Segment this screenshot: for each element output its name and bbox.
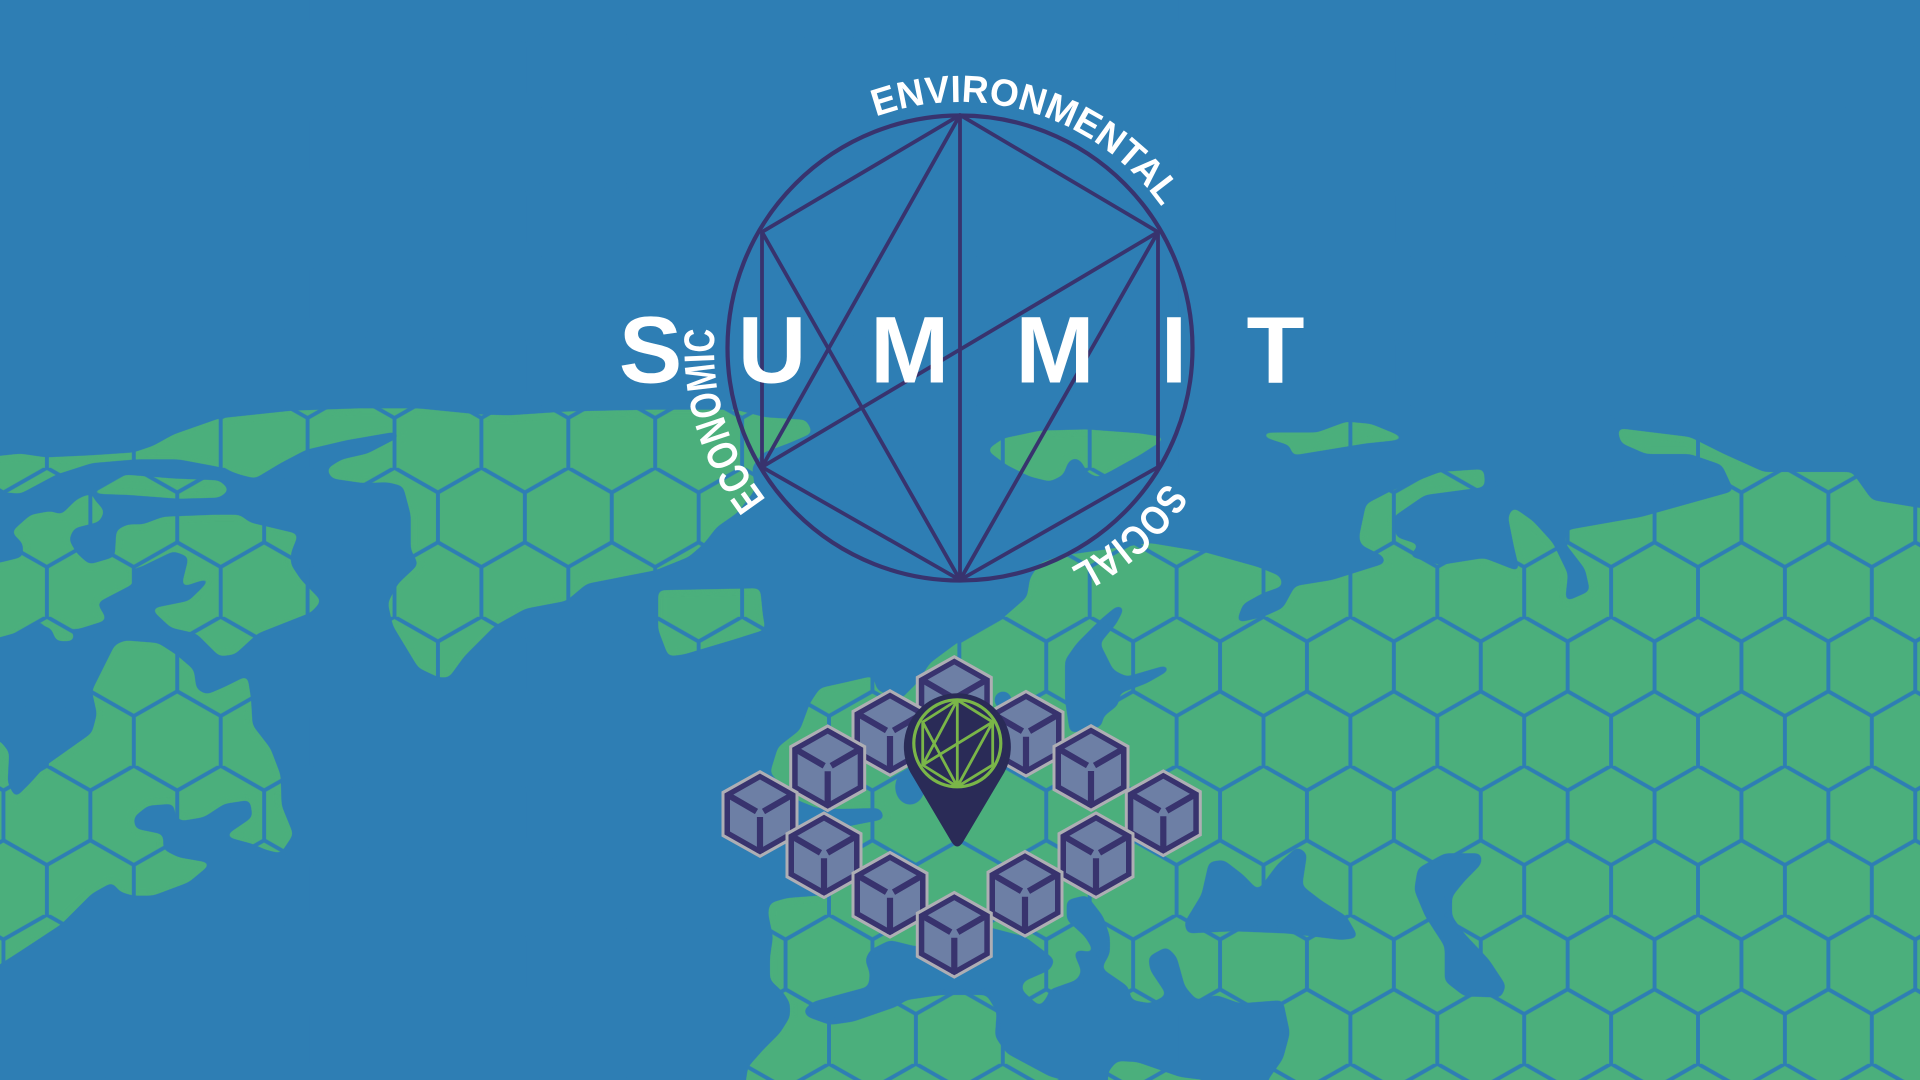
southern sea bbox=[803, 895, 1290, 1080]
label: SOCIAL: SOCIAL bbox=[1072, 486, 1186, 586]
label: ECONOMIC: ECONOMIC bbox=[684, 330, 765, 516]
cube: lower left bbox=[786, 811, 862, 899]
left continent bbox=[0, 408, 813, 974]
cube: lower left inner bbox=[852, 851, 928, 939]
cube: upper right bbox=[1052, 724, 1130, 812]
logo lattice lines bbox=[762, 115, 1158, 580]
title: SUMMIT: SUMMIT bbox=[619, 298, 1305, 404]
small lake by top cube bbox=[994, 691, 1012, 709]
northern inlet bbox=[1065, 606, 1170, 733]
southern sea island bbox=[1108, 1061, 1220, 1080]
logo: circle with hexagon lattice bbox=[728, 115, 1192, 580]
right continent bbox=[740, 428, 1920, 1080]
cube: top bbox=[916, 655, 993, 743]
pin body bbox=[904, 693, 1011, 846]
pin logo bbox=[914, 700, 1001, 787]
cube: far left bbox=[722, 770, 798, 858]
cube: lower right inner bbox=[986, 850, 1064, 938]
inland seas and lakes bbox=[803, 606, 1506, 1080]
small lake by pin bbox=[895, 769, 925, 805]
logo circle bbox=[728, 116, 1192, 580]
cube: upper left inner bbox=[852, 689, 928, 777]
cube: bottom bbox=[916, 891, 993, 979]
central island bbox=[987, 429, 1167, 482]
small northern island bbox=[1263, 422, 1408, 456]
land masses bbox=[0, 408, 1920, 1080]
label: ENVIRONMENTAL: ENVIRONMENTAL bbox=[870, 76, 1174, 206]
cube: upper left bbox=[789, 724, 866, 812]
icon: map pin with logo bbox=[904, 693, 1011, 846]
cube ring bbox=[722, 655, 1202, 979]
cube: lower right bbox=[1058, 811, 1134, 899]
cube: upper right inner bbox=[988, 690, 1064, 778]
cube: far right bbox=[1125, 769, 1202, 857]
eastern lakes bbox=[1184, 847, 1506, 998]
